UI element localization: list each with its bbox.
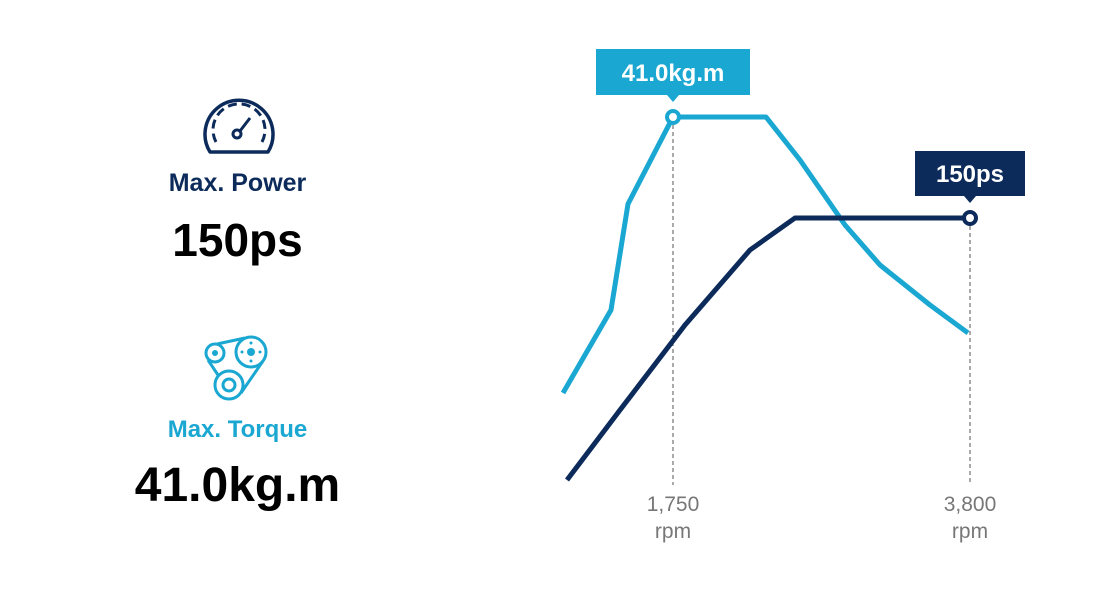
icon: belt pulleys — [204, 336, 268, 400]
axis label: 3,800 rpm: 3,800 — [944, 493, 996, 516]
axis label: 1,750 rpm: 1,750 — [647, 493, 699, 516]
label: Max. Power: Max. Power — [169, 169, 306, 197]
axis label: 3,800 rpm — [944, 493, 996, 543]
callout: 41.0kg.m — [596, 49, 750, 102]
value: 41.0kg.m: 41.0kg.m — [135, 459, 340, 512]
axis label: 1,750 rpm — [647, 493, 699, 543]
callout: 150ps — [915, 151, 1025, 203]
axis label: 3,800 rpm: rpm — [952, 520, 988, 543]
axis label: 1,750 rpm: rpm — [655, 520, 691, 543]
icon: speedometer — [203, 98, 275, 154]
callout: 41.0kg.m: 41.0kg.m — [622, 60, 724, 87]
value: 150ps: 150ps — [172, 214, 303, 266]
torque curve — [563, 111, 968, 393]
label: Max. Torque: Max. Torque — [168, 416, 307, 443]
callout: 150ps: 150ps — [936, 161, 1004, 188]
power curve — [567, 212, 976, 480]
